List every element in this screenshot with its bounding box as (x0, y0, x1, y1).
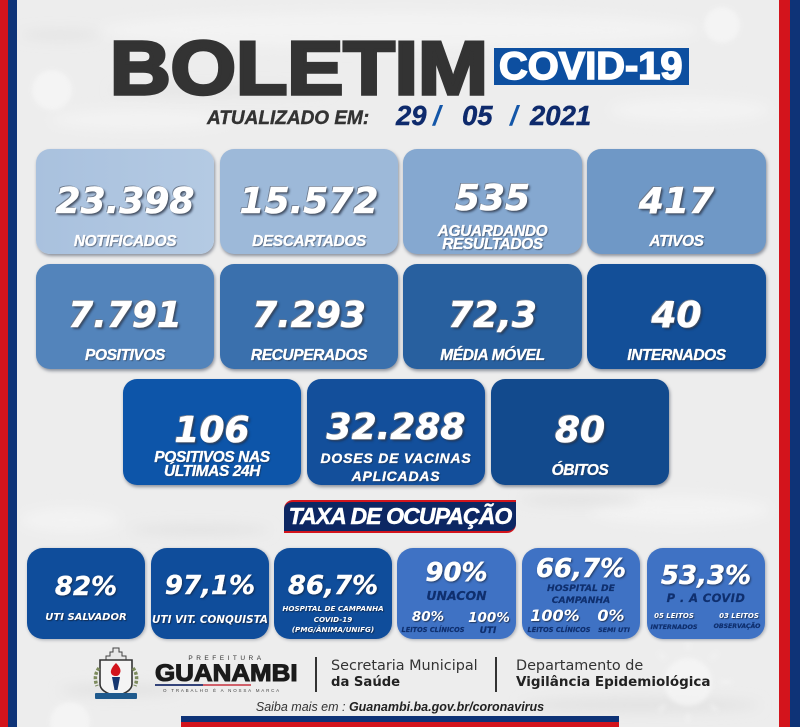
card: hospital de campanha covid-19: (PMG/ÂNIMA/UNIFG) (292, 625, 374, 634)
text: departamento: Vigilância Epidemiológica (516, 674, 711, 690)
text: secretaria municipal: da Saúde (331, 674, 400, 690)
card: internados: INTERNADOS (627, 347, 726, 364)
card: positivos 24h: POSITIVOS NAS (154, 449, 270, 466)
website link text: Saiba mais em : Guanambi.ba.gov.br/coronavirus (256, 700, 544, 714)
text: secretaria municipal (331, 658, 478, 690)
card: ativos: ATIVOS (649, 233, 704, 250)
card: doses de vacinas (307, 379, 485, 485)
card: uti vit. conquista (151, 548, 269, 639)
card: positivos 24h: ÚLTIMAS 24H (164, 463, 260, 480)
card: notificados: NOTIFICADOS (74, 233, 176, 250)
text: secretaria municipal: Secretaria Municipal (331, 658, 478, 674)
card: uti salvador: 82% (55, 572, 117, 602)
date value: 2021 (530, 100, 591, 131)
card: doses de vacinas: 32.288 (327, 407, 465, 448)
card: hospital de campanha covid-19: 86,7% (288, 571, 378, 601)
card: internados (587, 264, 766, 369)
card: uti salvador: UTI SALVADOR (45, 612, 127, 623)
card: hospital de campanha: SEMI UTI (598, 626, 630, 634)
date value: 29 (396, 100, 427, 131)
logo motto: O TRABALHO É A NOSSA MARCA (163, 688, 281, 693)
card: recuperados: 7.293 (252, 295, 366, 336)
card: hospital de campanha: 0% (597, 606, 625, 625)
card: positivos: 7.791 (68, 295, 182, 336)
card: recuperados: RECUPERADOS (251, 347, 367, 364)
divider left (315, 657, 317, 692)
card: aguardando resultados (403, 149, 582, 254)
card: positivos (36, 264, 214, 369)
card: ativos: 417 (639, 181, 714, 222)
card: uti vit. conquista: UTI VIT. CONQUISTA (152, 614, 268, 626)
card: unacon: UTI (480, 626, 496, 636)
card: aguardando resultados: RESULTADOS (442, 236, 543, 253)
card: notificados: 23.398 (56, 181, 194, 222)
card: doses de vacinas: DOSES DE VACINAS (320, 450, 472, 466)
card: hospital de campanha: CAMPANHA (552, 595, 610, 606)
icon: guanambi coat of arms (94, 648, 138, 699)
date label: ATUALIZADO EM: (207, 108, 369, 129)
card: p.a covid: 03 LEITOS (719, 612, 759, 620)
card: media movel (403, 264, 582, 369)
card: obitos: ÓBITOS (552, 462, 608, 479)
card: recuperados (220, 264, 398, 369)
card: hospital de campanha: HOSPITAL DE (547, 583, 615, 594)
card: positivos 24h (123, 379, 301, 485)
card: hospital de campanha covid-19: HOSPITAL DE CAMPANHA (282, 604, 384, 613)
card: hospital de campanha covid-19: COVID-19 (314, 614, 352, 624)
card: unacon (397, 548, 516, 639)
card: descartados: DESCARTADOS (252, 233, 366, 250)
card: media movel: 72,3 (448, 295, 537, 336)
card: p.a covid: 53,3% (661, 561, 751, 591)
date value (395, 100, 591, 131)
card: positivos: POSITIVOS (85, 347, 165, 364)
update date (206, 100, 591, 131)
card: positivos 24h: 106 (174, 410, 250, 451)
card: aguardando resultados: AGUARDANDO (438, 223, 547, 240)
card: obitos: 80 (555, 410, 605, 451)
card: aguardando resultados: 535 (455, 178, 530, 219)
card: hospital de campanha: 66,7% (536, 554, 626, 584)
text: departamento (516, 658, 711, 690)
card: internados: 40 (651, 295, 702, 336)
card: descartados: 15.572 (240, 181, 378, 222)
card: uti salvador (27, 548, 145, 639)
card: p.a covid: 05 LEITOS (654, 612, 694, 620)
side border: right (779, 0, 800, 727)
card: obitos (491, 379, 669, 485)
divider right (495, 657, 497, 692)
date value: 05 (462, 100, 493, 131)
card: media movel: MÉDIA MÓVEL (440, 347, 545, 364)
card: p.a covid (647, 548, 765, 639)
card: unacon: LEITOS CLÍNICOS (402, 626, 464, 634)
card: p.a covid: INTERNADOS (650, 623, 698, 631)
card: hospital de campanha: 100% (530, 606, 580, 625)
logo underline (155, 684, 251, 686)
text: departamento: Departamento de (516, 658, 643, 674)
card: unacon: UNACON (426, 588, 487, 603)
title: BOLETIM (110, 26, 488, 110)
card: doses de vacinas: APLICADAS (352, 468, 440, 484)
card: unacon: 90% (425, 558, 488, 588)
card: hospital de campanha (522, 548, 640, 639)
date value: / (510, 100, 518, 131)
card: notificados (36, 149, 214, 254)
heading: taxa de ocupacao: TAXA DE OCUPAÇÃO (289, 503, 511, 529)
card: unacon: 100% (468, 610, 510, 626)
logo: prefeitura guanambi (155, 655, 298, 693)
card: p.a covid: OBSERVAÇÃO (714, 623, 760, 630)
side border: left (0, 0, 17, 727)
card: descartados (220, 149, 398, 254)
logo top line: PREFEITURA (188, 655, 265, 662)
card: hospital de campanha: LEITOS CLÍNICOS (528, 626, 590, 634)
date value: / (433, 100, 441, 131)
card: ativos (587, 149, 766, 254)
bottom bar (181, 716, 619, 727)
card: p.a covid: P . A COVID (667, 591, 745, 605)
card: uti vit. conquista: 97,1% (165, 571, 255, 601)
card: unacon: 80% (412, 609, 444, 625)
card: hospital de campanha covid-19 (274, 548, 392, 639)
logo wordmark: GUANAMBI (155, 660, 298, 687)
